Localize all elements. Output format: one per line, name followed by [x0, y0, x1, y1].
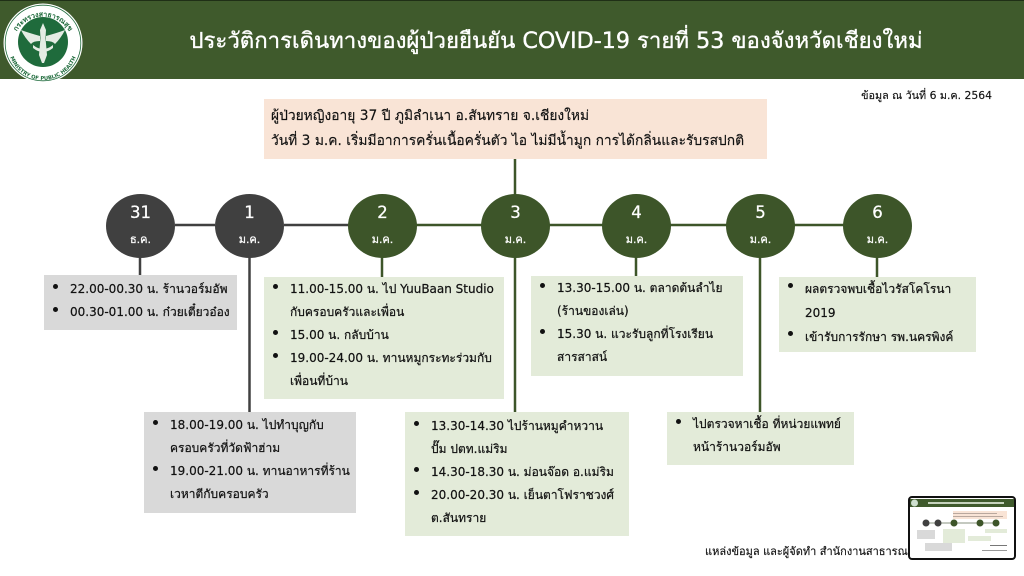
panel: 1 Jan activities: 18.00-19.00 น. ไปทำบุญกับ	[170, 418, 324, 432]
logo: ministry of public health seal: กระทรวงสาธารณสุข	[14, 12, 72, 32]
panel: 5 Jan activities: ไปตรวจหาเชื้อ ที่หน่วยแพทย์	[693, 417, 841, 431]
node: 2 Jan: 2	[377, 202, 388, 222]
panel: 1 Jan activities: ครอบครัวที่วัดฟ้าฮ่าม	[170, 441, 280, 455]
node: 4 Jan	[602, 194, 671, 258]
panel: 1 Jan activities: เวหาตีกับครอบครัว	[170, 487, 269, 501]
panel: 6 Jan activities: 2019	[805, 306, 836, 320]
panel: 2 Jan activities: กับครอบครัวและเพื่อน	[290, 305, 404, 319]
panel: 3 Jan activities: 14.30-18.30 น. ม่อนจ๊อด อ.แม่ริม	[431, 465, 614, 479]
panel: 6 Jan activities	[779, 277, 976, 352]
patient summary callout: ผู้ป่วยหญิงอายุ 37 ปี ภูมิลำเนา อ.สันทราย จ.เชียงใหม่	[271, 108, 589, 124]
node: 5 Jan: 5	[755, 202, 766, 222]
panel: 5 Jan activities	[667, 412, 854, 465]
panel: 1 Jan activities	[144, 412, 356, 513]
node: 2 Jan: ม.ค.	[372, 232, 393, 246]
date note: ข้อมูล ณ วันที่ 6 ม.ค. 2564	[861, 89, 992, 102]
logo: ministry of public health seal	[4, 4, 82, 82]
panel: 5 Jan activities: หน้าร้านวอร์มอัพ	[693, 440, 781, 454]
patient summary callout	[264, 99, 767, 159]
panel: 3 Jan activities: ปั๊ม ปตท.แม่ริม	[431, 442, 507, 456]
panel: 2 Jan activities: 15.00 น. กลับบ้าน	[290, 328, 389, 342]
node: 31 Dec: ธ.ค.	[130, 232, 151, 246]
header banner	[0, 0, 1024, 79]
panel: 2 Jan activities	[264, 277, 504, 399]
title: ประวัติการเดินทางของผู้ป่วยยืนยัน COVID-19 รายที่ 53 ของจังหวัดเชียงใหม่	[189, 28, 923, 54]
patient summary callout: วันที่ 3 ม.ค. เริ่มมีอาการครั่นเนื้อครั่นตัว ไอ ไม่มีน้ำมูก การได้กลิ่นและรับรสปกติ	[271, 133, 744, 149]
panel: 31 Dec activities: 00.30-01.00 น. ก๋วยเตี๋ยวอ๋อง	[70, 305, 230, 319]
panel: 2 Jan activities: 19.00-24.00 น. ทานหมูกระทะร่วมกับ	[290, 351, 492, 365]
node: 5 Jan: ม.ค.	[750, 232, 771, 246]
node: 1 Jan: ม.ค.	[239, 232, 260, 246]
node: 3 Jan: 3	[510, 202, 521, 222]
panel: 4 Jan activities: สารสาสน์	[557, 350, 607, 364]
panel: 2 Jan activities: 11.00-15.00 น. ไป YuuBaan Studio	[290, 282, 494, 296]
node: 31 Dec	[106, 194, 175, 258]
panel: 4 Jan activities: 15.30 น. แวะรับลูกที่โรงเรียน	[557, 327, 713, 341]
node: 6 Jan	[843, 194, 912, 258]
node: 5 Jan	[726, 194, 795, 258]
node: 2 Jan	[348, 194, 417, 258]
panel: 6 Jan activities: เข้ารับการรักษา รพ.นครพิงค์	[805, 330, 953, 344]
node: 4 Jan: 4	[631, 202, 642, 222]
panel: 4 Jan activities: (ร้านของเล่น)	[557, 304, 629, 318]
node: 6 Jan: ม.ค.	[867, 232, 888, 246]
panel: 6 Jan activities: ผลตรวจพบเชื้อไวรัสโคโรนา	[805, 282, 951, 296]
panel: 3 Jan activities: 13.30-14.30 ไปร้านหมูคำหวาน	[431, 419, 603, 433]
panel: 2 Jan activities: เพื่อนที่บ้าน	[290, 374, 348, 388]
node: 31 Dec: 31	[130, 202, 151, 222]
node: 1 Jan	[215, 194, 284, 258]
panel: 1 Jan activities: 19.00-21.00 น. ทานอาหารที่ร้าน	[170, 464, 350, 478]
panel: 31 Dec activities: 22.00-00.30 น. ร้านวอร์มอัพ	[70, 282, 228, 296]
panel: 4 Jan activities	[531, 276, 743, 376]
node: 4 Jan: ม.ค.	[626, 232, 647, 246]
node: 3 Jan	[481, 194, 550, 258]
panel: 4 Jan activities: 13.30-15.00 น. ตลาดต้นลำไย	[557, 281, 723, 295]
thumbnail preview of slide	[908, 496, 1016, 560]
logo: ministry of public health seal: MINISTRY OF PUBLIC HEALTH	[10, 56, 76, 80]
panel: 3 Jan activities: ต.สันทราย	[431, 511, 486, 525]
node: 6 Jan: 6	[872, 202, 883, 222]
node: 1 Jan: 1	[244, 202, 255, 222]
panel: 31 Dec activities	[44, 275, 237, 330]
panel: 3 Jan activities	[405, 412, 629, 536]
node: 3 Jan: ม.ค.	[505, 232, 526, 246]
panel: 3 Jan activities: 20.00-20.30 น. เย็นตาโฟราชวงศ์	[431, 488, 614, 502]
